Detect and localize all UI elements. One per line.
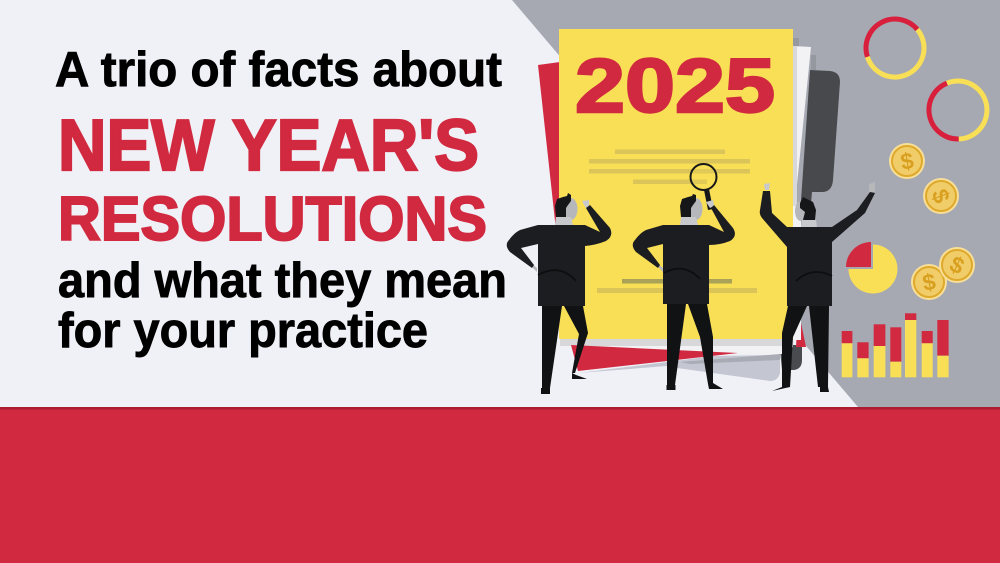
- figure: right businessman arms raised: [760, 182, 875, 392]
- icon: ring chart top: [866, 19, 924, 77]
- icon: coin 4: $: [946, 251, 968, 280]
- floor shadow: [578, 355, 780, 381]
- heading: NEW YEAR'S: NEW YEAR'S: [58, 106, 479, 186]
- red sheet bottom: [571, 345, 738, 371]
- icon: coin 2: [923, 178, 959, 214]
- clipboard bottom: [780, 345, 802, 370]
- text: and what they mean: and what they mean: [58, 254, 507, 308]
- panel: red footer band: [0, 407, 1000, 563]
- pie chart: [846, 242, 898, 294]
- panel: grey diagonal background: [512, 0, 1000, 407]
- white back sheet: [793, 46, 811, 340]
- icon: coin 2: $: [927, 186, 955, 207]
- red strip behind figure: [796, 318, 806, 347]
- red back sheet: [538, 62, 560, 230]
- icon: coin 3: $: [920, 268, 938, 296]
- stacked bar chart: [842, 313, 949, 377]
- illustration: document stack: [538, 29, 840, 381]
- icon: coin 1: [889, 143, 925, 179]
- heading: intro line: A trio of facts about: [55, 43, 502, 97]
- icon: coin 4: [939, 247, 975, 283]
- heading: RESOLUTIONS: RESOLUTIONS: [58, 185, 487, 254]
- shadows behind sheets: [793, 38, 799, 47]
- figure: middle businessman with magnifying glass: [633, 164, 735, 390]
- page text lines: [589, 150, 757, 293]
- icon: ring chart bottom: [929, 81, 987, 139]
- icon: coin 3: [911, 264, 947, 300]
- text: for your practice: for your practice: [58, 304, 428, 358]
- yellow page: [559, 29, 793, 339]
- year 2025: 2025: [575, 44, 775, 129]
- dark clipboard: [800, 70, 840, 215]
- title block: [55, 43, 507, 358]
- icon: magnifying glass: [690, 164, 716, 210]
- figure: left businessman: [507, 193, 611, 394]
- white sheet below yellow: [560, 339, 793, 354]
- icon: coin 1: $: [898, 147, 916, 175]
